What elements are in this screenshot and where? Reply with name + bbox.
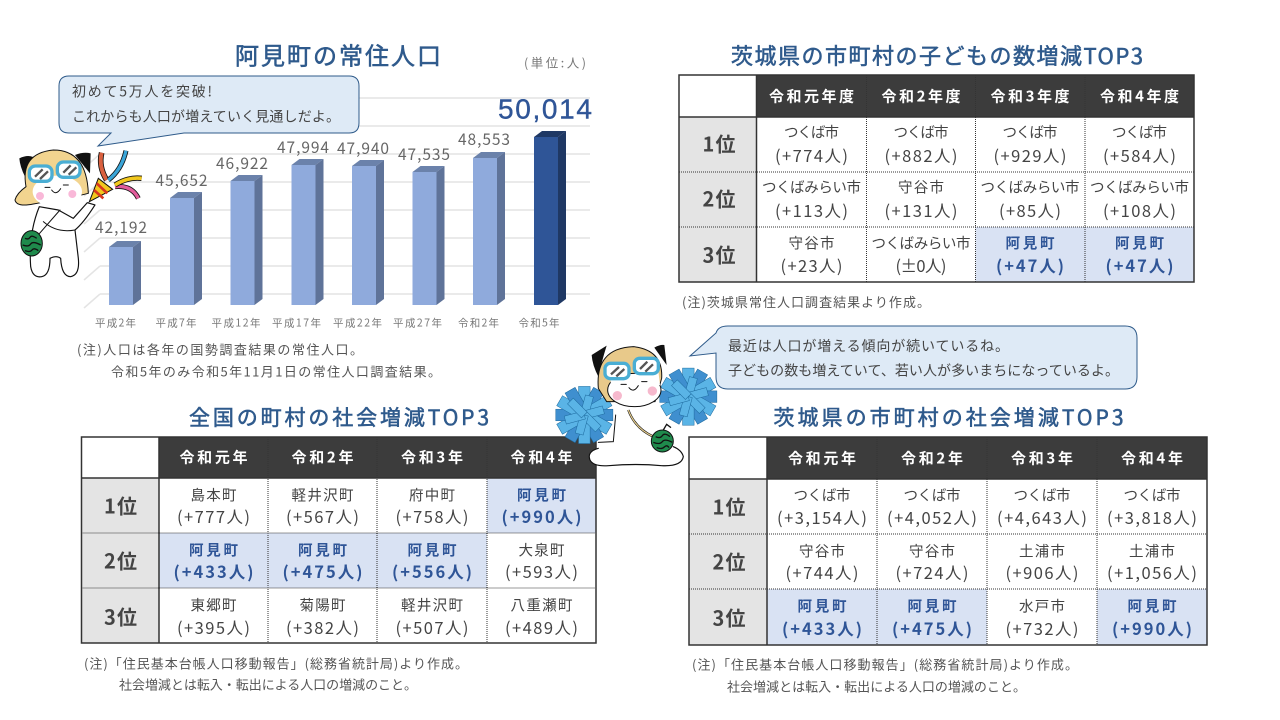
row: rank 3: 水戸市 <box>1019 596 1065 616</box>
row: rank 1: つくば市 <box>894 122 948 142</box>
note: prefecture table <box>692 654 1078 696</box>
character: cheerleader mascot <box>556 345 717 466</box>
row: rank 2: 2位 <box>702 184 736 212</box>
header row <box>180 446 572 468</box>
header row: 令和3年度 <box>990 86 1070 106</box>
table background cells <box>689 437 1207 645</box>
row: rank 1: (+567人) <box>286 504 359 528</box>
x axis labels: 平成7年 <box>156 316 196 330</box>
row: rank 1: 府中町 <box>409 484 456 506</box>
callout: center speech bubble <box>690 326 1137 389</box>
row: rank 2: 阿見町 <box>298 540 348 560</box>
row: rank 3: 3位 <box>104 602 137 630</box>
row: rank 1: つくば市 <box>904 484 960 506</box>
table background cells <box>82 437 596 643</box>
row: rank 3: 八重瀬町 <box>510 594 573 616</box>
row: rank 3: (+433人) <box>782 616 862 640</box>
row: rank 2: 土浦市 <box>1129 540 1175 562</box>
note: prefecture table: 社会増減とは転入・転出による人口の増減のこと。 <box>727 676 1026 696</box>
chart note: (注)人口は各年の国勢調査結果の常住人口。 <box>77 340 363 358</box>
note: prefecture table: (注)「住民基本台帳人口移動報告」(総務省統計局)より作成。 <box>692 654 1078 674</box>
row: rank 3: 阿見町 <box>798 596 847 616</box>
row: rank 1: つくば市 <box>1002 122 1058 142</box>
data labels: 47,940 <box>337 137 389 159</box>
row: rank 2: 守谷市 <box>909 540 955 562</box>
row: rank 1: (+4,643人) <box>997 505 1087 529</box>
row: rank 2: (+85人) <box>999 198 1061 222</box>
row: rank 3: (+507人) <box>396 615 468 639</box>
row: rank 2: (+108人) <box>1103 198 1176 222</box>
row: rank 1: (+3,818人) <box>1107 505 1197 529</box>
callout: top left speech bubble <box>59 76 359 146</box>
row: rank 1: つくば市 <box>1124 484 1180 506</box>
data labels: 48,553 <box>458 128 510 150</box>
row: rank 3: 3位 <box>702 240 736 268</box>
row: rank 1: 軽井沢町 <box>292 484 354 506</box>
row: rank 3: 守谷市 <box>788 232 834 254</box>
row: rank 2: (+131人) <box>884 198 958 222</box>
row: rank 3: (+23人) <box>780 253 842 277</box>
icon: watermelon bag <box>651 424 673 452</box>
table: national social increase top 3 <box>82 437 596 643</box>
header row: 令和4年度 <box>1100 86 1179 106</box>
data labels: 50,014 <box>498 94 592 124</box>
header row: 令和4年 <box>510 446 572 468</box>
row: rank 2: つくばみらい市 <box>980 176 1080 198</box>
x axis labels: 令和5年 <box>518 316 560 330</box>
header row: 令和3年 <box>401 446 463 468</box>
title: children table: 茨城県の市町村の子どもの数増減TOP3 <box>731 39 1143 71</box>
row: rank 3: (+732人) <box>1006 616 1078 640</box>
row: rank 3: (+382人) <box>286 615 359 639</box>
row: rank 2: 阿見町 <box>408 540 457 560</box>
note: national table <box>84 654 468 694</box>
character: popper mascot <box>15 150 142 277</box>
note: national table: (注)「住民基本台帳人口移動報告」(総務省統計局)より作成。 <box>84 654 468 672</box>
row: rank 1: 1位 <box>104 490 137 520</box>
data labels: 46,922 <box>216 152 268 174</box>
row: rank 1 <box>702 122 1176 167</box>
x axis labels: 平成22年 <box>333 316 382 330</box>
bar: 平成2年 <box>109 241 141 305</box>
x axis labels <box>95 316 560 330</box>
row: rank 3: (+990人) <box>1112 616 1192 640</box>
row: rank 2: (+1,056人) <box>1107 560 1197 584</box>
row: rank 3: (+395人) <box>177 615 250 639</box>
data labels: 42,192 <box>95 216 147 238</box>
chart note: 令和5年のみ令和5年11月1日の常住人口調査結果。 <box>111 362 441 380</box>
x axis labels: 平成27年 <box>393 316 442 330</box>
row: rank 1: つくば市 <box>794 484 850 506</box>
row: rank 3: 阿見町 <box>1128 596 1177 616</box>
row: rank 1: つくば市 <box>1014 484 1070 506</box>
header row <box>788 448 1183 468</box>
callout: center speech bubble: 子どもの数も増えていて、若い人が多いまちになっているよ。 <box>728 360 1119 380</box>
chart title: 阿見町の常住人口 <box>235 36 441 72</box>
table: children count top 3 <box>679 75 1194 282</box>
bar: 平成17年 <box>292 159 324 305</box>
row: rank 2: (+556人) <box>392 559 472 583</box>
row: rank 1: (+929人) <box>994 143 1066 167</box>
row: rank 3: 軽井沢町 <box>401 594 464 616</box>
row: rank 2 <box>104 540 578 583</box>
bar: 平成22年 <box>352 160 384 305</box>
row: rank 3: (+489人) <box>505 615 578 639</box>
row: rank 2: (+744人) <box>786 560 858 584</box>
bar chart: resident population <box>84 94 592 330</box>
header row: 令和2年 <box>901 448 963 468</box>
row: rank 1: (+774人) <box>775 143 848 167</box>
row: rank 2: 守谷市 <box>898 176 944 198</box>
row: rank 3 <box>712 596 1192 640</box>
row: rank 1 <box>104 484 582 528</box>
row: rank 3: 3位 <box>712 602 746 632</box>
row: rank 3: (+475人) <box>892 616 972 640</box>
icon: party popper <box>89 151 142 202</box>
row: rank 3: 阿見町 <box>908 596 957 616</box>
row: rank 1: つくば市 <box>784 122 839 142</box>
row: rank 3: 菊陽町 <box>300 594 346 616</box>
row: rank 2: 2位 <box>104 546 137 574</box>
row: rank 3: 阿見町 <box>1115 232 1164 254</box>
row: rank 2: 守谷市 <box>799 540 845 562</box>
header row: 令和2年度 <box>882 86 960 106</box>
row: rank 1: (+882人) <box>884 143 958 167</box>
row: rank 1: (+758人) <box>396 504 468 528</box>
row: rank 1: (+777人) <box>177 504 250 528</box>
bar: 令和5年 <box>534 131 566 305</box>
row: rank 2: つくばみらい市 <box>762 176 861 198</box>
bar: 令和2年 <box>473 152 505 305</box>
row: rank 3 <box>702 232 1174 277</box>
row: rank 2: (+593人) <box>505 559 578 583</box>
callout: top left speech bubble: これからも人口が増えていく見通しだよ。 <box>72 106 340 126</box>
header row <box>769 86 1179 106</box>
icon: watermelon bag <box>21 231 42 256</box>
title: prefecture table: 茨城県の市町村の社会増減TOP3 <box>774 402 1124 432</box>
row: rank 1: (+3,154人) <box>777 505 867 529</box>
header row: 令和元年度 <box>769 86 854 106</box>
row: rank 2 <box>712 540 1197 584</box>
callout: center speech bubble: 最近は人口が増える傾向が続いているね。 <box>728 336 1009 356</box>
x axis labels: 平成12年 <box>212 316 260 330</box>
data labels <box>95 94 592 238</box>
row: rank 2: (+113人) <box>775 198 848 222</box>
row: rank 2: つくばみらい市 <box>1090 176 1189 198</box>
callout: top left speech bubble: 初めて5万人を突破! <box>72 82 212 102</box>
unit label: (単位:人) <box>524 52 586 72</box>
row: rank 2 <box>702 176 1189 222</box>
note: national table: 社会増減とは転入・転出による人口の増減のこと。 <box>119 674 417 694</box>
row: rank 1: つくば市 <box>1112 122 1167 142</box>
data labels: 47,535 <box>398 143 450 165</box>
row: rank 2: (+433人) <box>174 559 254 583</box>
table background cells <box>679 75 1194 282</box>
icon: right pompom <box>660 368 717 425</box>
icon: left pompom <box>556 386 613 444</box>
bar: 平成12年 <box>230 175 262 305</box>
header row: 令和元年 <box>180 446 248 468</box>
row: rank 3: 阿見町 <box>1006 232 1055 254</box>
row: rank 2: 阿見町 <box>189 540 238 560</box>
note: children table: (注)茨城県常住人口調査結果より作成。 <box>682 292 930 311</box>
x axis labels: 平成17年 <box>272 316 321 330</box>
row: rank 1: 阿見町 <box>517 484 566 506</box>
bar: 平成27年 <box>412 166 444 305</box>
chart note <box>77 340 441 380</box>
row: rank 2: 大泉町 <box>518 540 565 560</box>
row: rank 2: (+906人) <box>1006 560 1078 584</box>
row: rank 1 <box>712 484 1197 529</box>
row: rank 3: 東郷町 <box>190 594 237 616</box>
row: rank 2: 土浦市 <box>1019 540 1065 562</box>
row: rank 1: 1位 <box>702 128 736 158</box>
row: rank 1: (+990人) <box>502 504 582 528</box>
row: rank 3: つくばみらい市 <box>872 232 970 254</box>
header row: 令和4年 <box>1121 448 1183 468</box>
row: rank 2: (+475人) <box>282 559 362 583</box>
row: rank 1: (+584人) <box>1103 143 1176 167</box>
table: prefecture social increase top 3 <box>689 437 1207 645</box>
bar: 平成7年 <box>170 192 202 305</box>
x axis labels: 令和2年 <box>458 316 499 330</box>
header row: 令和元年 <box>788 448 856 468</box>
row: rank 2: 2位 <box>712 546 746 576</box>
row: rank 3: (+47人) <box>1106 253 1174 277</box>
header row: 令和2年 <box>292 446 354 468</box>
title: national table: 全国の町村の社会増減TOP3 <box>189 402 489 432</box>
row: rank 2: (+724人) <box>896 560 968 584</box>
row: rank 3: (±0人) <box>896 253 946 277</box>
row: rank 3 <box>104 594 578 639</box>
row: rank 3: (+47人) <box>996 253 1064 277</box>
header row: 令和3年 <box>1011 448 1073 468</box>
data labels: 47,994 <box>277 136 329 158</box>
row: rank 1: 島本町 <box>190 484 237 506</box>
row: rank 1: (+4,052人) <box>887 505 977 529</box>
x axis labels: 平成2年 <box>95 316 136 330</box>
data labels: 45,652 <box>156 169 208 191</box>
row: rank 1: 1位 <box>712 492 746 520</box>
